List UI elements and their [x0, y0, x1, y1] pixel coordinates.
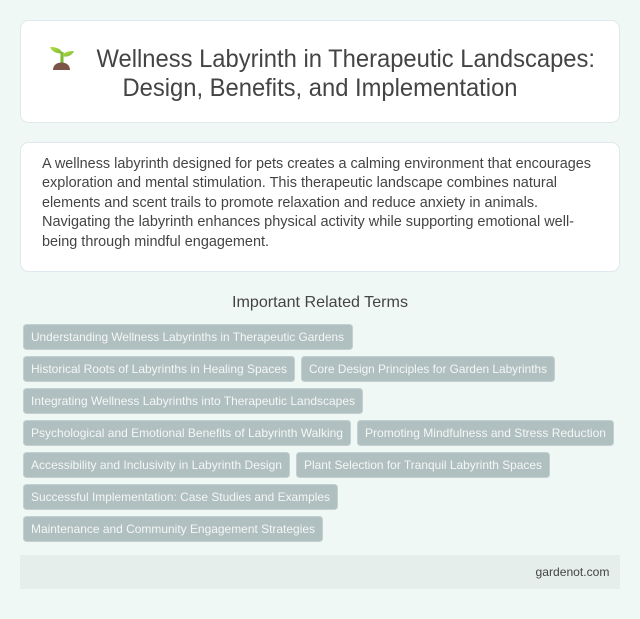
- chips: related terms: Integrating Wellness Labyrinths into Therapeutic Landscapes: [31, 394, 355, 408]
- chips: related terms: Psychological and Emotional Benefits of Labyrinth Walking: [31, 426, 343, 440]
- chips: related terms: Historical Roots of Labyrinths in Healing Spaces: [31, 362, 287, 376]
- text block: description: A wellness labyrinth designed for pets creates a calming environment that encourages: [42, 156, 591, 172]
- chips: related terms: Successful Implementation: Case Studies and Examples: [31, 490, 330, 504]
- title: [96, 45, 595, 102]
- chips: related terms: Maintenance and Community Engagement Strategies: [31, 522, 315, 536]
- icon: seedling: [50, 47, 74, 70]
- text block: description: Navigating the labyrinth enhances physical activity while supporting emotional well-: [42, 214, 574, 230]
- text block: description: elements and scent trails to promote relaxation and reduce anxiety in animals.: [42, 195, 538, 211]
- panel: description: [20, 142, 620, 272]
- chips: related terms: Accessibility and Inclusivity in Labyrinth Design: [31, 458, 282, 472]
- chips: related terms: Promoting Mindfulness and Stress Reduction: [365, 426, 606, 440]
- title: Design, Benefits, and Implementation: [122, 74, 518, 102]
- chips: related terms: Core Design Principles for Garden Labyrinths: [309, 362, 547, 376]
- panel: title card: [20, 20, 620, 122]
- chips: related terms: Understanding Wellness Labyrinths in Therapeutic Gardens: [31, 330, 344, 344]
- heading: related terms: Important Related Terms: [232, 294, 408, 311]
- chips: related terms: [24, 324, 614, 542]
- title: Wellness Labyrinth in Therapeutic Landscapes:: [96, 45, 595, 73]
- text block: description: [42, 156, 591, 250]
- text block: description: exploration and mental stimulation. This therapeutic landscape combines natural: [42, 175, 557, 191]
- text block: description: being through mindful engagement.: [42, 234, 269, 250]
- footer bar: [20, 555, 620, 589]
- footer: source: gardenot.com: [536, 565, 610, 579]
- chips: related terms: Plant Selection for Tranquil Labyrinth Spaces: [304, 458, 542, 472]
